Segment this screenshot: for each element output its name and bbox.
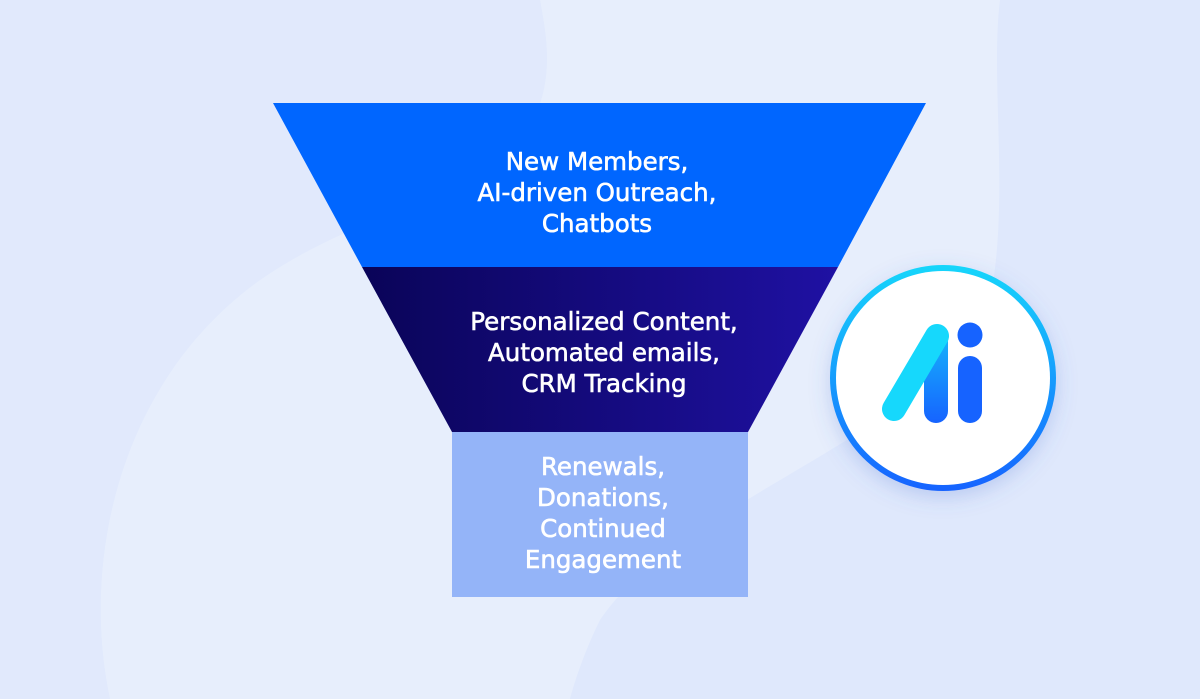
funnel top tier [273, 103, 926, 267]
text: middle tier: Automated emails, [488, 338, 720, 367]
icon: AI badge [830, 265, 1056, 491]
text: bottom tier: Renewals, [541, 452, 665, 481]
text: middle tier [470, 307, 738, 398]
text: middle tier: Personalized Content, [470, 307, 738, 336]
text: top tier [477, 147, 716, 238]
text: bottom tier: Donations, [537, 483, 669, 512]
funnel bottom tier [452, 432, 748, 597]
text: middle tier: CRM Tracking [521, 369, 687, 398]
text: bottom tier [525, 452, 681, 574]
text: top tier: Chatbots [542, 209, 652, 238]
text: bottom tier: Continued [540, 514, 666, 543]
text: top tier: AI-driven Outreach, [478, 178, 716, 207]
funnel middle tier [362, 267, 838, 432]
text: bottom tier: Engagement [525, 545, 681, 574]
text: top tier: New Members, [506, 147, 688, 176]
